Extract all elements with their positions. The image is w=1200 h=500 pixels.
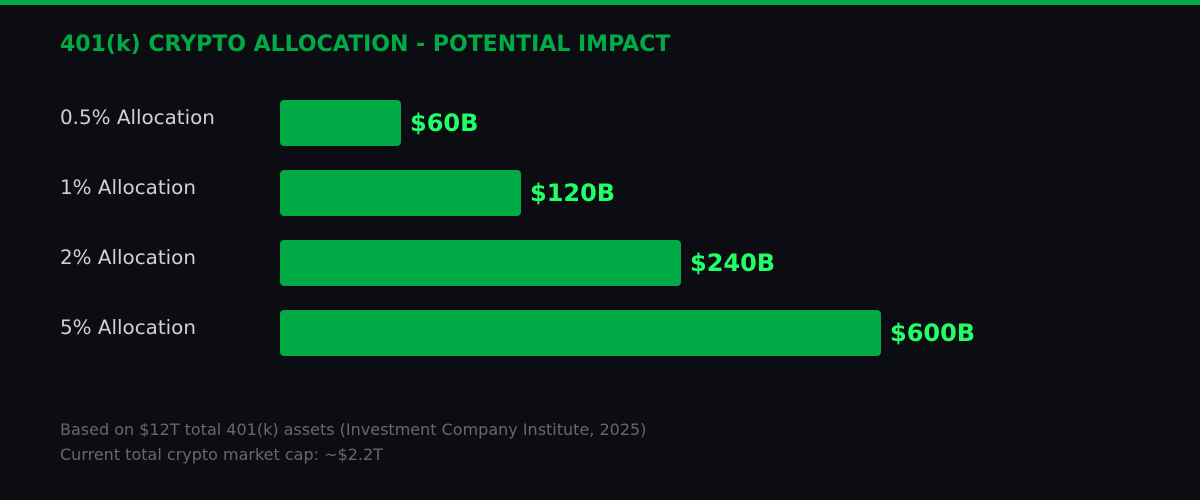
row: 2%: $240B <box>690 249 775 277</box>
row: 5% <box>60 310 975 356</box>
row: 2%: 2% Allocation <box>60 246 196 269</box>
row: 2% <box>60 240 775 286</box>
bar chart <box>60 100 975 356</box>
row: 1% <box>60 170 615 216</box>
footnote <box>60 420 646 464</box>
footnote: Based on $12T total 401(k) assets (Investment Company Institute, 2025) <box>60 420 646 439</box>
footnote: Current total crypto market cap: ~$2.2T <box>60 445 383 464</box>
row: 0.5% <box>60 100 478 146</box>
row: 1%: $120B <box>530 179 615 207</box>
top accent bar <box>0 0 1200 5</box>
row: 5%: $600B <box>890 319 975 347</box>
row: 0.5%: $60B <box>410 109 478 137</box>
row: 5%: 5% Allocation <box>60 316 196 339</box>
row: 0.5%: 0.5% Allocation <box>60 106 215 129</box>
row: 1%: 1% Allocation <box>60 176 196 199</box>
title: 401(k) CRYPTO ALLOCATION - POTENTIAL IMPACT <box>60 32 670 57</box>
